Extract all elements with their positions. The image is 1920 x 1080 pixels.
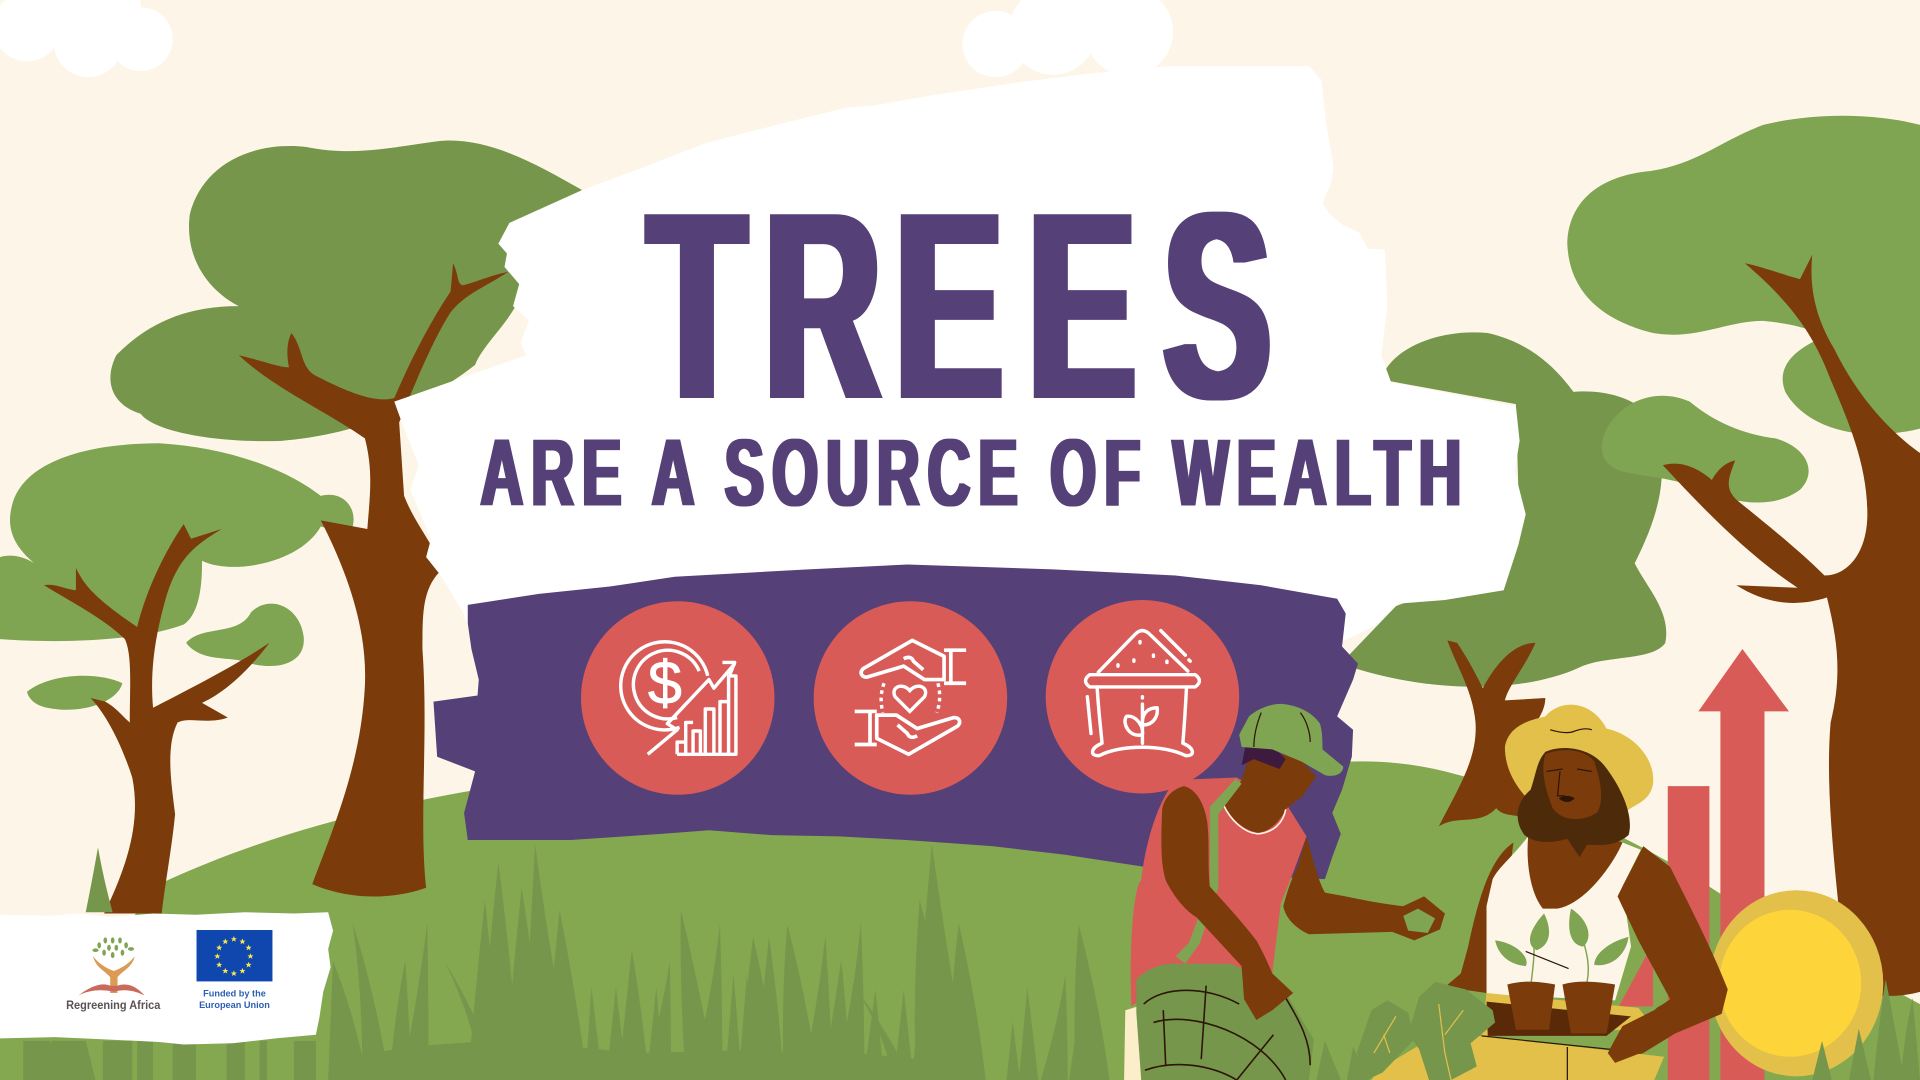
logo: European Union flag: Funded by the [203,989,266,999]
tree: small left [0,443,354,913]
man: farmer in cap [1124,704,1445,1080]
growth chart arrows [1619,649,1789,1080]
icon circle 2: hands and heart [814,601,1007,795]
clouds [0,0,1173,77]
woman: farmer with hat [1357,705,1728,1080]
icon circle 3: grain sack [1046,600,1239,793]
grass [23,844,1920,1080]
plants in pots [1371,909,1664,1080]
icon: bottom hand [855,711,960,754]
tree: far right [1567,116,1920,996]
subtitle: ARE A SOURCE OF WEALTH [481,419,1461,526]
logo: European Union flag [197,930,272,1010]
logo: Regreening Africa: Regreening Africa [66,999,161,1012]
white brush banner [394,66,1526,686]
icon circle 1: money growth [581,601,774,795]
hill [0,761,1920,1080]
logo panel [0,912,333,1044]
icon: top hand [861,640,966,683]
logo: European Union flag: European Union [199,1000,270,1010]
coin [1709,890,1883,1076]
lettuce [1357,982,1495,1080]
tree: large left [110,140,582,897]
logo: Regreening Africa [66,937,161,1012]
title: TREES [648,157,1271,455]
icon circle 1: money growth: $ [648,649,682,717]
purple brush banner [433,564,1358,879]
tree: right middle [1341,332,1666,827]
